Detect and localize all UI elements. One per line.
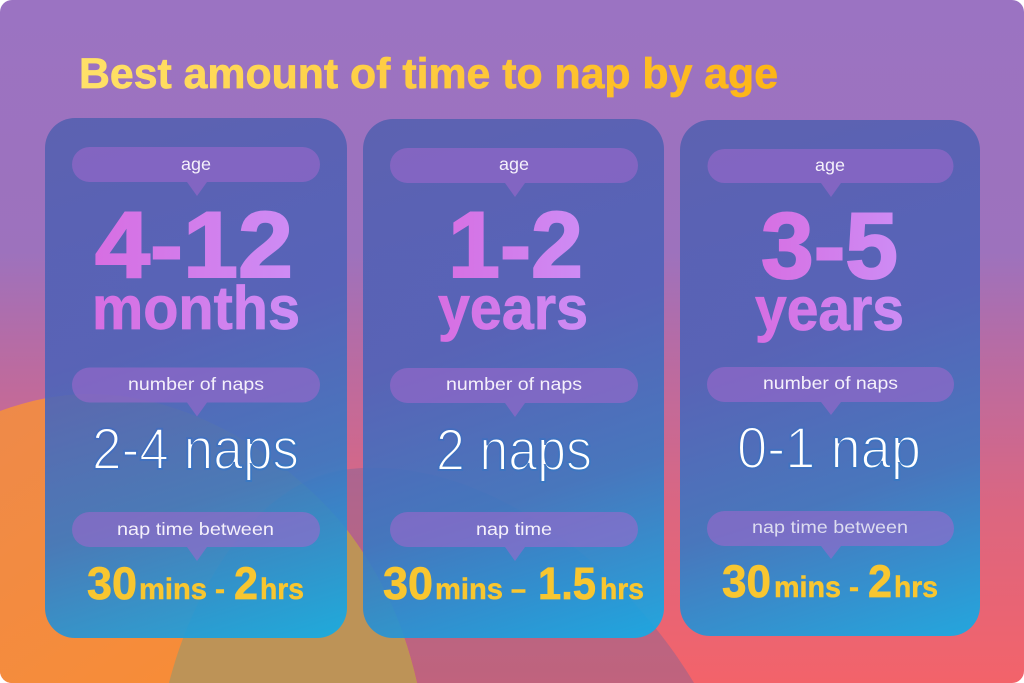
nap time value: hrs (894, 571, 938, 604)
title: Best amount of time to nap by age (79, 50, 778, 98)
nap time pill: nap time between (752, 517, 908, 537)
age value: 1-2 (448, 192, 583, 297)
age unit: months (92, 274, 300, 342)
age label pill (390, 148, 638, 197)
nap time value: mins (774, 571, 841, 604)
panel: 1-2 years (363, 119, 664, 638)
panel: 3-5 years (680, 120, 980, 636)
nap time value: 2 (868, 556, 892, 607)
nap time value: - (215, 573, 225, 606)
nap time value (87, 558, 304, 609)
number of naps pill: number of naps (763, 373, 898, 393)
nap time value (383, 558, 644, 609)
card background (45, 118, 347, 638)
number of naps value: 2-4 naps (92, 417, 299, 482)
age label pill: age (499, 154, 529, 174)
age value: 3-5 (761, 193, 898, 298)
decorative blob: purple (347, 468, 694, 683)
card background (363, 119, 664, 638)
nap time value: 1.5 (538, 558, 596, 609)
nap time pill (72, 512, 320, 561)
age label pill: age (815, 155, 845, 175)
nap time value: mins (139, 573, 207, 606)
nap time value: – (511, 573, 526, 606)
nap time pill: nap time between (117, 519, 274, 539)
nap time pill: nap time (476, 519, 552, 539)
age label pill (72, 147, 320, 196)
age label pill: age (181, 154, 211, 174)
card background (680, 120, 980, 636)
nap time value: 30 (383, 558, 433, 609)
number of naps pill: number of naps (446, 374, 582, 394)
age value: 4-12 (95, 192, 293, 297)
number of naps pill: number of naps (128, 374, 264, 394)
panel: 4-12 months (45, 118, 347, 638)
number of naps value: 2 naps (436, 418, 592, 483)
nap time value: - (849, 571, 859, 604)
age unit: years (438, 274, 588, 342)
nap time pill (390, 512, 638, 561)
number of naps pill (72, 368, 320, 416)
decorative blob: overlap (169, 530, 417, 683)
age unit: years (755, 275, 904, 343)
number of naps pill (707, 367, 954, 415)
nap time value: hrs (260, 573, 304, 606)
nap time value: 30 (722, 556, 771, 607)
decorative blob: orange (0, 394, 417, 683)
nap time value: mins (435, 573, 503, 606)
number of naps value: 0-1 nap (737, 416, 921, 481)
nap time pill (707, 511, 954, 559)
number of naps pill (390, 368, 638, 417)
nap time value (722, 556, 938, 607)
nap time value: 2 (234, 558, 258, 609)
age label pill (708, 149, 954, 197)
nap time value: hrs (600, 573, 644, 606)
nap time value: 30 (87, 558, 137, 609)
